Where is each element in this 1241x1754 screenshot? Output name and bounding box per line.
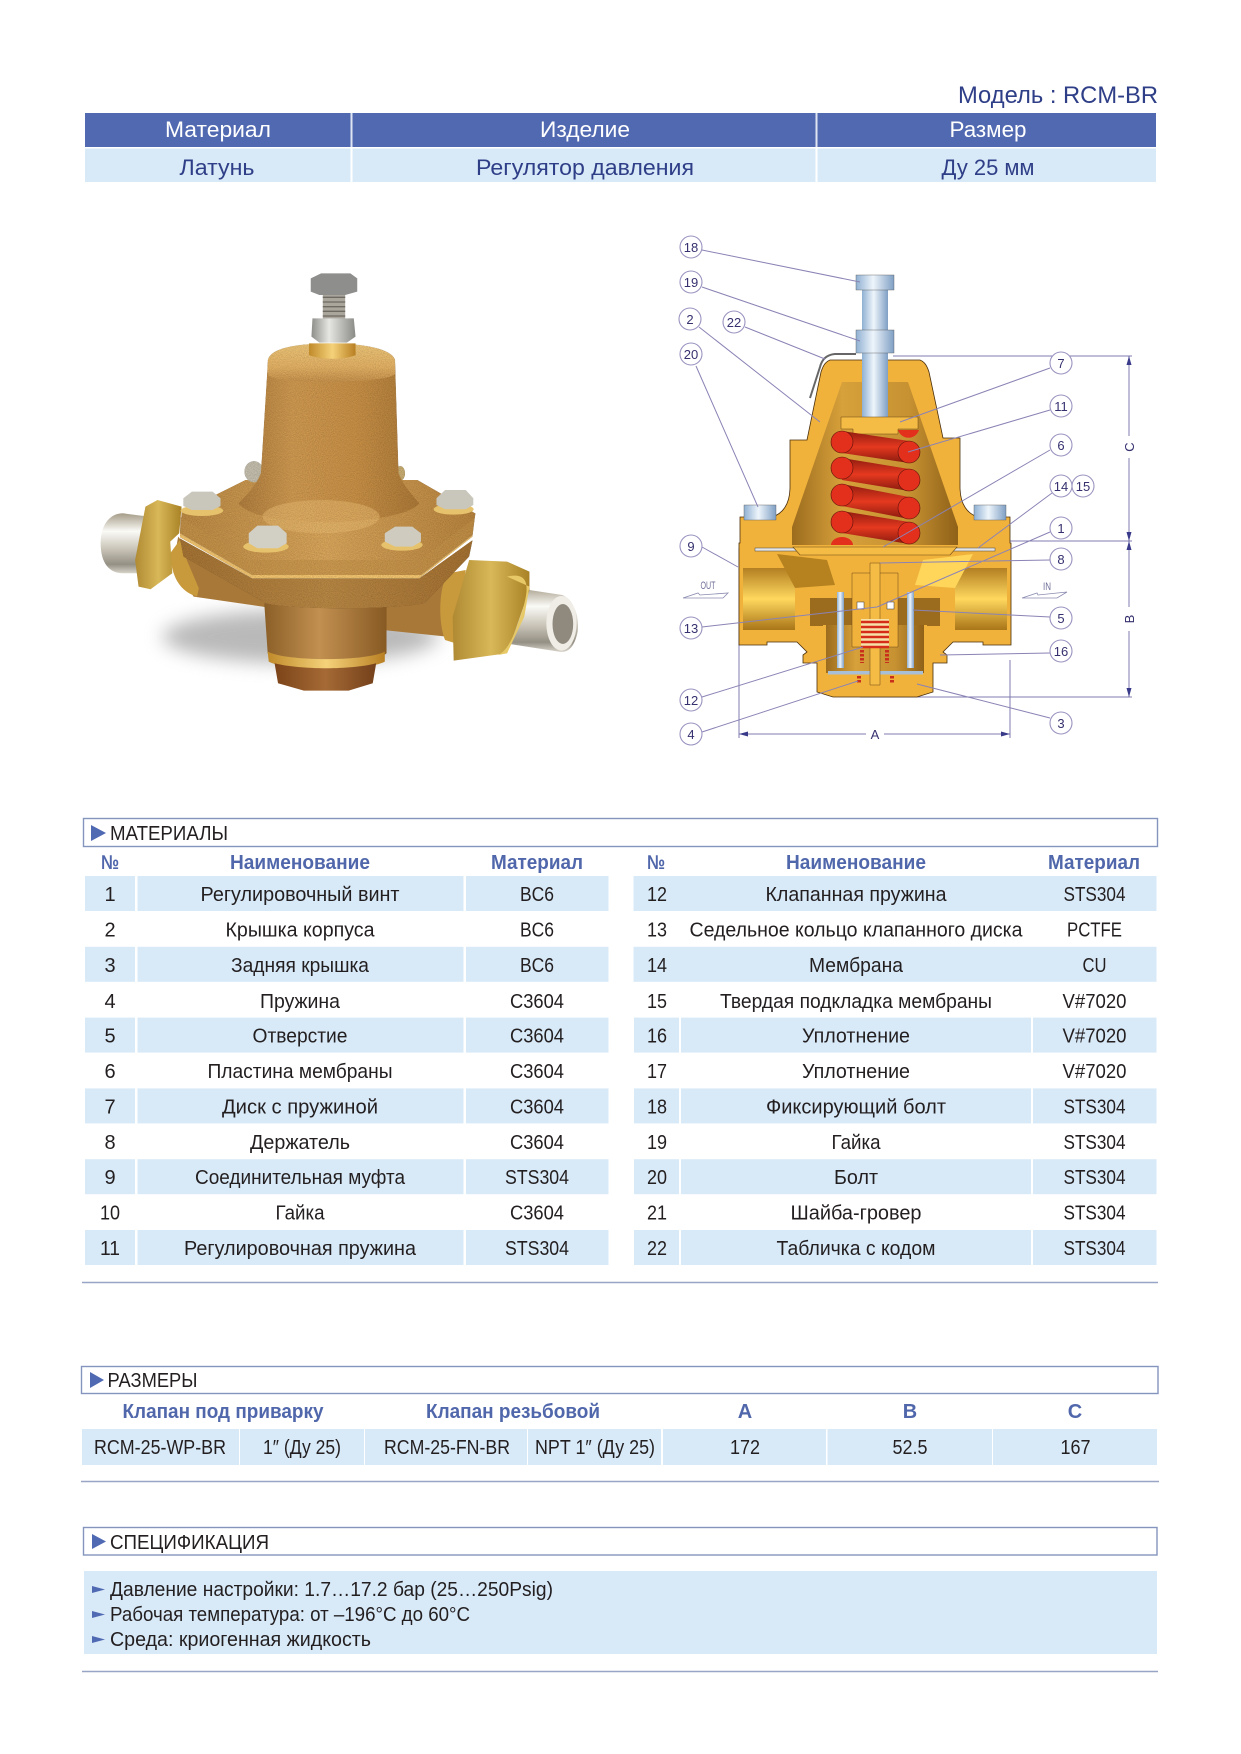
callout numbers: 22 [727,315,741,330]
panel: specification list: Среда: криогенная жидкость [110,1629,371,1651]
row text right: STS304 [1064,1132,1126,1154]
row text right: Фиксирующий болт [766,1096,946,1118]
callout numbers: 20 [684,347,698,362]
row text left: Задняя крышка [231,955,370,977]
column headings left [101,852,583,874]
callout numbers: 4 [687,727,695,742]
row text right: 13 [647,919,667,941]
row text right: Болт [834,1167,878,1189]
row text right: STS304 [1064,1167,1126,1189]
row text left: 9 [104,1167,116,1189]
row text left: 4 [104,991,116,1013]
dimension lines A B C: C [1122,442,1137,452]
column headings right [647,852,1140,874]
row text left: Диск с пружиной [222,1096,378,1118]
row text left: 7 [104,1096,116,1118]
row text left: Держатель [250,1132,350,1154]
row text right: V#7020 [1062,991,1126,1013]
callout numbers: 13 [684,621,698,636]
dimension lines A B C: B [1122,615,1137,623]
row bands right [634,876,1156,1265]
callout numbers: 5 [1057,611,1065,626]
dimension value row: 1″ (Ду 25) [263,1437,341,1459]
product photo: brass pressure regulator [101,273,578,691]
flow label IN [1022,581,1067,598]
callout numbers: 15 [1076,479,1090,494]
row text left: 10 [100,1203,120,1225]
summary value row: Регулятор давления [476,155,694,180]
red adjusting spring [831,430,920,545]
row text left: C3604 [510,991,564,1013]
row text left: C3604 [510,1096,564,1118]
row text right: STS304 [1064,884,1126,906]
callout numbers: 12 [684,693,698,708]
row text left: 8 [104,1132,116,1154]
callout numbers: 16 [1054,644,1068,659]
row text left: BC6 [520,919,554,941]
leader lines [696,250,1052,732]
dimension value row: NPT 1″ (Ду 25) [535,1437,655,1459]
row text right: V#7020 [1062,1026,1126,1048]
section heading: dimensions: РАЗМЕРЫ [108,1370,198,1392]
callout numbers: 14 [1054,479,1068,494]
callout numbers: 8 [1057,552,1065,567]
row text left: Пружина [260,991,341,1013]
column headings left: № [101,852,119,874]
dimension headings: A [738,1401,752,1423]
row text right: 22 [647,1238,667,1260]
callout numbers: 2 [686,312,694,327]
section heading: specification: СПЕЦИФИКАЦИЯ [110,1532,269,1554]
valve spring small [859,619,892,684]
dimension headings [122,1401,1082,1423]
row text right: Уплотнение [802,1061,910,1083]
row text right: CU [1082,955,1106,977]
row text right: STS304 [1064,1203,1126,1225]
column headings left: Материал [491,852,583,874]
flow label OUT: OUT [700,580,716,592]
row text left: BC6 [520,955,554,977]
row text right: Гайка [832,1132,881,1154]
row text right: 19 [647,1132,667,1154]
code plate [810,354,856,398]
panel: product summary table [85,113,1156,182]
row text left: Регулировочная пружина [184,1238,417,1260]
summary value row: Латунь [180,155,254,180]
row text left: Гайка [276,1203,325,1225]
row text left: 2 [104,919,116,941]
row text right: 16 [647,1026,667,1048]
callout numbers: 6 [1057,438,1065,453]
callout numbers [679,236,1094,745]
dimension value row [82,1429,1157,1465]
dimension headings: C [1068,1401,1082,1423]
column headings right: Материал [1048,852,1140,874]
column headings left: Наименование [230,852,370,874]
row text right: Шайба-гровер [790,1203,922,1225]
row text left: 5 [104,1026,116,1048]
row text left: 3 [104,955,116,977]
callout numbers: 19 [684,275,698,290]
row text left: C3604 [510,1026,564,1048]
valve body section [739,360,1011,697]
row text right: 14 [647,955,667,977]
row text left: 1 [104,884,116,906]
row text right: 18 [647,1096,667,1118]
summary header row: Размер [950,117,1026,142]
dimension lines A B C [739,356,1137,742]
section heading: materials [84,818,1158,846]
row text right: Мембрана [809,955,904,977]
row text left: Регулировочный винт [200,884,400,906]
row bands left [85,876,608,1265]
callout numbers: 9 [687,539,695,554]
row text right [647,884,1126,1260]
flow label IN: IN [1043,581,1051,593]
cutaway technical diagram [679,236,1137,745]
row text left: STS304 [505,1238,569,1260]
summary value row: Ду 25 мм [942,155,1034,180]
callout numbers: 18 [684,240,698,255]
dimension value row: RCM-25-WP-BR [94,1437,226,1459]
row text right: 15 [647,991,667,1013]
table: materials, items 12–22 [634,852,1156,1265]
table: materials, items 1–11 [85,852,608,1265]
table: dimensions [82,1401,1157,1465]
summary header row [85,113,1156,147]
panel: specification list [84,1571,1157,1654]
flow label OUT [683,580,728,598]
row text right: STS304 [1064,1238,1126,1260]
row text right: Уплотнение [802,1026,910,1048]
spring seat disc [841,417,918,434]
dimension headings: B [903,1401,917,1423]
row text left: C3604 [510,1132,564,1154]
row text right: PCTFE [1067,919,1122,941]
dimension value row: 167 [1060,1437,1090,1459]
row text left: 6 [104,1061,116,1083]
row text left: Отверстие [252,1026,348,1048]
row text right: 17 [647,1061,667,1083]
section heading: dimensions [82,1366,1158,1394]
dimension value row: 52.5 [892,1437,928,1459]
summary header row: Изделие [540,117,630,142]
model title: Модель : RCM-BR [958,82,1158,109]
summary value row [85,148,1156,182]
callout numbers: 1 [1057,521,1065,536]
section heading: specification [84,1528,1157,1555]
row text right: STS304 [1064,1096,1126,1118]
row text left: 11 [100,1238,120,1260]
dimension value row: 172 [730,1437,760,1459]
adjusting bolt and nut [744,275,1006,520]
row text right: 12 [647,884,667,906]
row text right: Твердая подкладка мембраны [720,991,992,1013]
row text left: Соединительная муфта [195,1167,406,1189]
row text left: Крышка корпуса [226,919,375,941]
row text left: BC6 [520,884,554,906]
callout numbers: 7 [1057,356,1065,371]
row text right: Клапанная пружина [766,884,947,906]
row text left: C3604 [510,1203,564,1225]
dimension headings: Клапан резьбовой [426,1401,600,1423]
row text left: STS304 [505,1167,569,1189]
row text right: 20 [647,1167,667,1189]
callout numbers: 3 [1057,716,1065,731]
row text left [100,884,569,1260]
dimension lines A B C: A [871,727,880,742]
summary header row: Материал [165,117,271,142]
row text left: Пластина мембраны [208,1061,392,1083]
dimension headings: Клапан под приварку [122,1401,324,1423]
row text right: 21 [647,1203,667,1225]
column headings right: № [647,852,665,874]
panel: specification list: Давление настройки: 1.7…17.2 бар (25…250Psig) [110,1579,553,1601]
column headings right: Наименование [786,852,926,874]
row text right: Табличка с кодом [776,1238,936,1260]
section heading: materials: МАТЕРИАЛЫ [110,823,228,845]
row text left: C3604 [510,1061,564,1083]
row text right: Седельное кольцо клапанного диска [690,919,1023,941]
row text right: V#7020 [1062,1061,1126,1083]
dimension value row: RCM-25-FN-BR [384,1437,510,1459]
panel: specification list: Рабочая температура: от –196°C до 60°C [110,1604,470,1626]
callout numbers: 11 [1054,399,1068,414]
